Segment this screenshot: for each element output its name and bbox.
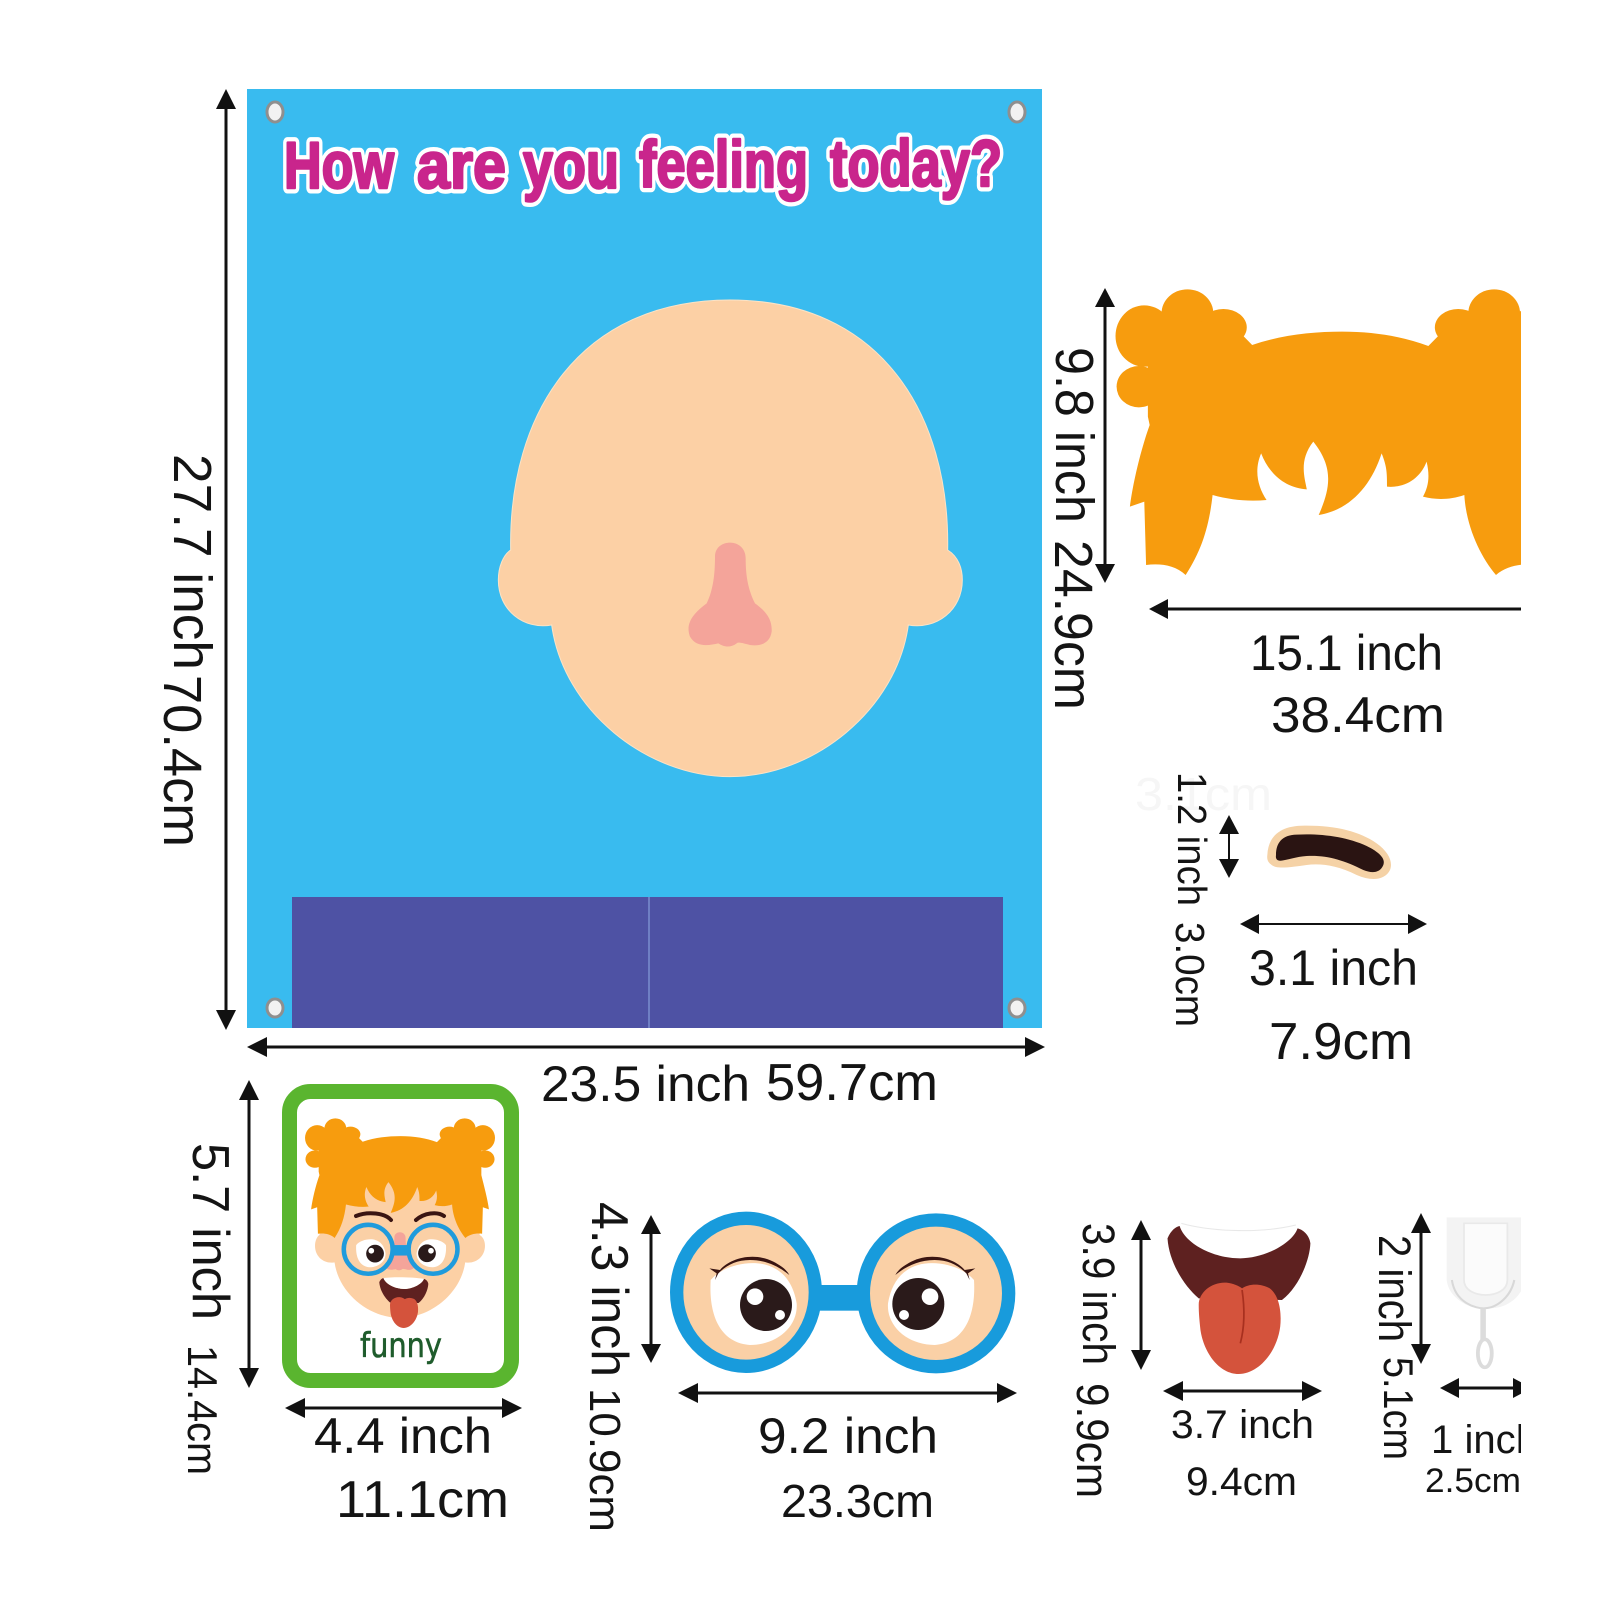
glasses width label: 9.2 inch xyxy=(758,1408,938,1464)
face with ears xyxy=(498,300,962,777)
board width label xyxy=(541,1054,938,1112)
title: How xyxy=(284,128,395,202)
hair height label: 24.9cm xyxy=(1043,540,1103,710)
hook width label xyxy=(1426,1424,1521,1492)
title: you xyxy=(523,128,619,202)
card glasses xyxy=(344,1225,457,1274)
title: feeling xyxy=(639,127,808,201)
card brows xyxy=(356,1213,444,1220)
card width arrow xyxy=(285,1398,522,1418)
mouth height label: 9.9cm xyxy=(1067,1383,1118,1498)
mouth height label xyxy=(1067,1223,1124,1498)
pocket xyxy=(292,897,1003,1028)
hair height label xyxy=(1043,347,1104,710)
board height label xyxy=(152,454,222,847)
card head xyxy=(315,1143,485,1318)
glasses width arrow xyxy=(678,1383,1017,1403)
card caption: funny xyxy=(360,1326,442,1366)
hair width label: 38.4cm xyxy=(1271,687,1445,743)
board height label: 27.7 inch xyxy=(162,454,222,670)
glasses height label xyxy=(580,1202,638,1532)
hair width label xyxy=(1250,625,1445,743)
card height label xyxy=(179,1143,239,1475)
hair width label: 15.1 inch xyxy=(1250,625,1443,681)
hair height arrow xyxy=(1095,288,1115,583)
eyebrow height label xyxy=(1167,772,1215,1027)
eyebrow width label: 3.1 inch xyxy=(1249,940,1418,996)
card width label: 4.4 inch xyxy=(314,1408,492,1464)
board width label: 59.7cm xyxy=(766,1054,938,1112)
eyebrow width label: 7.9cm xyxy=(1269,1013,1413,1071)
glasses piece xyxy=(677,1218,1009,1367)
glasses height arrow xyxy=(641,1215,661,1363)
eyebrow height arrow xyxy=(1219,815,1239,878)
mouth width label: 9.4cm xyxy=(1186,1460,1297,1504)
title: today? xyxy=(830,126,1002,200)
ghost text: 3.1cm xyxy=(1135,768,1272,820)
hook width label: 2.5cm xyxy=(1425,1462,1521,1500)
card height label: 5.7 inch xyxy=(181,1143,239,1320)
card hair xyxy=(305,1118,495,1238)
mouth piece xyxy=(1168,1223,1310,1374)
title: How xyxy=(284,128,395,202)
icon: grommets xyxy=(267,102,1025,1017)
mouth width label: 3.7 inch xyxy=(1171,1403,1314,1447)
eyebrow width arrow xyxy=(1240,914,1427,934)
card mouth xyxy=(379,1277,428,1328)
hook width arrow xyxy=(1440,1378,1521,1398)
panel: funny card xyxy=(290,1092,512,1380)
hook width label: 1 inch xyxy=(1431,1418,1538,1462)
title: are xyxy=(417,128,506,202)
title: feeling xyxy=(639,127,808,201)
card height label: 14.4cm xyxy=(179,1345,226,1475)
hook height label xyxy=(1369,1235,1422,1460)
hair height label: 9.8 inch xyxy=(1044,347,1104,523)
card height arrow xyxy=(239,1080,259,1388)
title: today? xyxy=(830,126,1002,200)
mouth height label: 3.9 inch xyxy=(1073,1223,1124,1365)
nose xyxy=(689,543,772,646)
mouth width arrow xyxy=(1163,1381,1322,1401)
eyebrow height label: 1.2 inch xyxy=(1169,772,1215,906)
glasses height label: 4.3 inch xyxy=(580,1202,638,1377)
panel: hair piece xyxy=(1116,289,1566,575)
hook height label: 2 inch xyxy=(1369,1235,1420,1342)
glasses width label xyxy=(758,1408,938,1527)
glasses height label: 10.9cm xyxy=(580,1388,629,1532)
board width arrow xyxy=(247,1037,1045,1057)
mouth height arrow xyxy=(1131,1220,1151,1370)
panel: blue felt board xyxy=(247,89,1042,1028)
eyebrow piece xyxy=(1267,826,1391,879)
board height arrow xyxy=(216,89,236,1030)
mouth width label xyxy=(1171,1403,1314,1504)
card width label: 11.1cm xyxy=(336,1471,509,1529)
title xyxy=(284,126,1002,202)
eyebrow width label xyxy=(1249,940,1418,1071)
hook piece xyxy=(1447,1217,1525,1367)
board width label: 23.5 inch xyxy=(541,1056,750,1112)
hair width arrow xyxy=(1149,599,1521,619)
hook height label: 5.1cm xyxy=(1375,1357,1422,1460)
glasses width label: 23.3cm xyxy=(781,1475,934,1527)
title: are xyxy=(417,128,506,202)
eyebrow height label: 3.0cm xyxy=(1167,922,1213,1027)
card width label xyxy=(314,1408,509,1529)
title: you xyxy=(523,128,619,202)
hook height arrow xyxy=(1411,1213,1431,1364)
board height label: 70.4cm xyxy=(152,675,212,847)
